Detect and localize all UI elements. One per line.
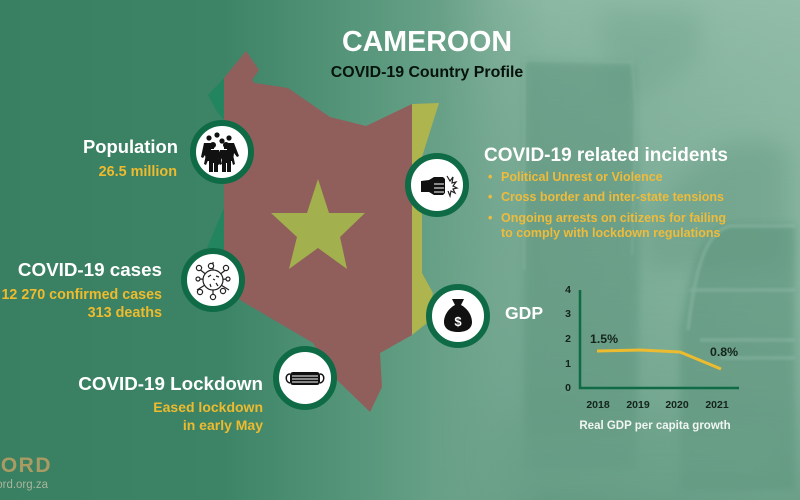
icon: face mask xyxy=(276,349,334,407)
y axis labels: 2 xyxy=(565,333,571,345)
logo: ACCORD xyxy=(0,454,52,491)
bullet: ongoing arrests: to comply with lockdown regulations xyxy=(501,226,721,240)
map: flag star xyxy=(271,179,365,269)
icon: virus xyxy=(184,251,242,309)
bullet: political unrest: Political Unrest or Violence xyxy=(501,170,663,184)
map: red flag band xyxy=(224,51,412,412)
y axis labels: 3 xyxy=(565,308,571,320)
map: yellow flag band xyxy=(412,103,439,335)
incidents heading: COVID-19 related incidents xyxy=(484,145,728,166)
lockdown heading: COVID-19 Lockdown xyxy=(78,373,263,394)
chart caption: Real GDP per capita growth xyxy=(579,420,731,432)
y axis labels: 1 xyxy=(565,358,571,370)
title: CAMEROON xyxy=(342,26,512,58)
map: green flag band xyxy=(207,78,236,250)
icon: money bag xyxy=(429,287,487,345)
background photo: burnt vehicles tinted green xyxy=(250,0,800,500)
map: Cameroon flag inside country outline xyxy=(207,51,439,412)
icon: people xyxy=(193,123,251,181)
chart axes xyxy=(580,290,739,388)
data label 2018: 1.5% xyxy=(590,332,618,346)
covid cases heading: COVID-19 cases xyxy=(18,259,162,280)
x axis labels xyxy=(586,399,729,411)
confirmed cases: 12 270 confirmed cases xyxy=(1,287,162,303)
lockdown block xyxy=(78,373,263,433)
bullet: ongoing arrests: Ongoing arrests on citizens for failing xyxy=(501,211,726,225)
x axis labels: 2019 xyxy=(626,399,650,411)
data label 2021: 0.8% xyxy=(710,345,738,359)
covid cases block xyxy=(1,259,162,321)
x axis labels: 2020 xyxy=(665,399,689,411)
population heading: Population xyxy=(83,136,178,157)
bullet: ongoing arrests: • xyxy=(488,211,492,225)
x axis labels: 2021 xyxy=(705,399,729,411)
incidents block xyxy=(484,145,728,240)
line chart: real GDP per capita growth xyxy=(565,284,739,432)
data line xyxy=(597,350,721,369)
bullet: cross border: Cross border and inter-state tensions xyxy=(501,190,724,204)
lockdown detail line 2: in early May xyxy=(183,417,263,433)
y axis labels: 0 xyxy=(565,382,571,394)
x axis labels: 2018 xyxy=(586,399,610,411)
bullet: political unrest: • xyxy=(488,170,492,184)
population block xyxy=(83,136,178,180)
icon: fist xyxy=(408,156,466,214)
lockdown detail line 1: Eased lockdown xyxy=(153,399,263,415)
GDP label: GDP xyxy=(505,303,543,323)
population value: 26.5 million xyxy=(99,164,177,180)
icon: money bag: $ xyxy=(454,314,462,329)
y axis labels: 4 xyxy=(565,284,571,296)
subtitle: COVID-19 Country Profile xyxy=(331,64,523,81)
bullet: cross border: • xyxy=(488,190,492,204)
deaths: 313 deaths xyxy=(88,305,162,321)
logo: ACCORD: ORD xyxy=(1,454,52,477)
y axis labels xyxy=(565,284,571,394)
